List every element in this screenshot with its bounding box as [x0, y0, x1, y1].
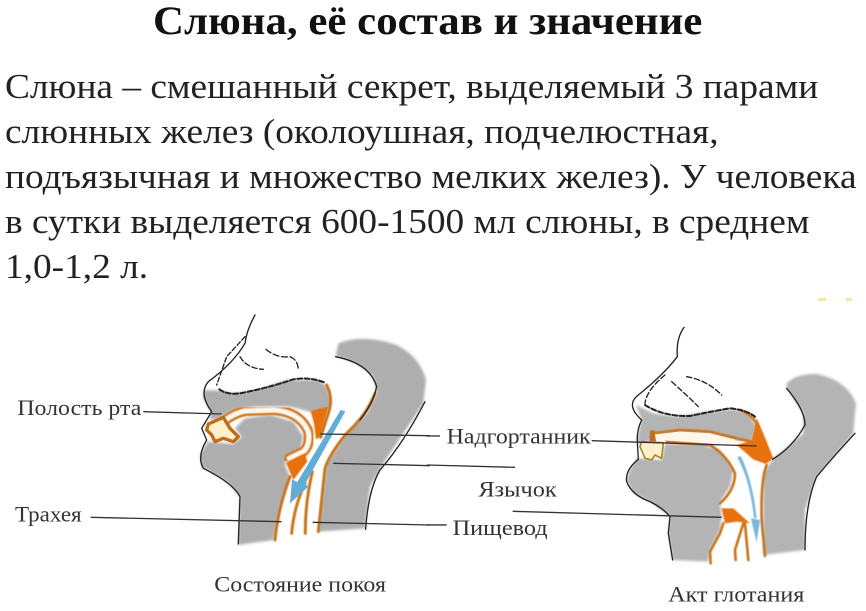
- labels and leaders in the middle: [427, 423, 805, 607]
- orange walls of pharynx and tubes: [275, 385, 375, 540]
- label: epiglottis: Надгортанник: [447, 423, 592, 448]
- head outline: [201, 315, 425, 544]
- palate cream band: [653, 432, 735, 443]
- teeth: [640, 442, 663, 460]
- text block: definition of saliva: слюнных желез (околоушная, подчелюстная,: [5, 112, 719, 151]
- label: esophagus: Пищевод: [453, 515, 548, 540]
- text block: definition of saliva: подъязычная и множество мелких желез). У человека: [5, 157, 857, 196]
- mucosa band: [653, 410, 767, 563]
- text block: definition of saliva: 1,0-1,2 л.: [5, 247, 148, 286]
- orange tissue fills: [722, 418, 773, 523]
- diagram: resting state head section: [91, 315, 430, 545]
- labels for resting state: [15, 395, 387, 597]
- text block: definition of saliva: [5, 67, 857, 286]
- yellow specks: [818, 298, 852, 301]
- leader lines: [427, 436, 515, 525]
- text block: definition of saliva: Слюна – смешанный секрет, выделяемый 3 парами: [5, 67, 818, 106]
- label: oral cavity: Полость рта: [17, 395, 141, 420]
- blue air flow: [737, 456, 760, 543]
- caption: swallowing: Акт глотания: [668, 582, 805, 607]
- text block: definition of saliva: в сутки выделяется 600-1500 мл слюны, в среднем: [5, 202, 810, 241]
- teeth: [207, 417, 238, 442]
- leader lines: [513, 441, 757, 517]
- gray tissue: [200, 339, 426, 545]
- blue air arrow: [290, 410, 345, 503]
- label: trachea: Трахея: [15, 502, 82, 527]
- label: uvula: Язычок: [478, 477, 558, 502]
- gray tissue: [627, 374, 856, 562]
- palate and tongue mucosa band: [217, 410, 309, 458]
- diagram: act of swallowing head section: [513, 327, 856, 563]
- caption: resting state: Состояние покоя: [214, 572, 387, 597]
- head outline: [626, 327, 855, 560]
- orange tissue fills: [286, 407, 328, 480]
- leader lines: [91, 412, 430, 525]
